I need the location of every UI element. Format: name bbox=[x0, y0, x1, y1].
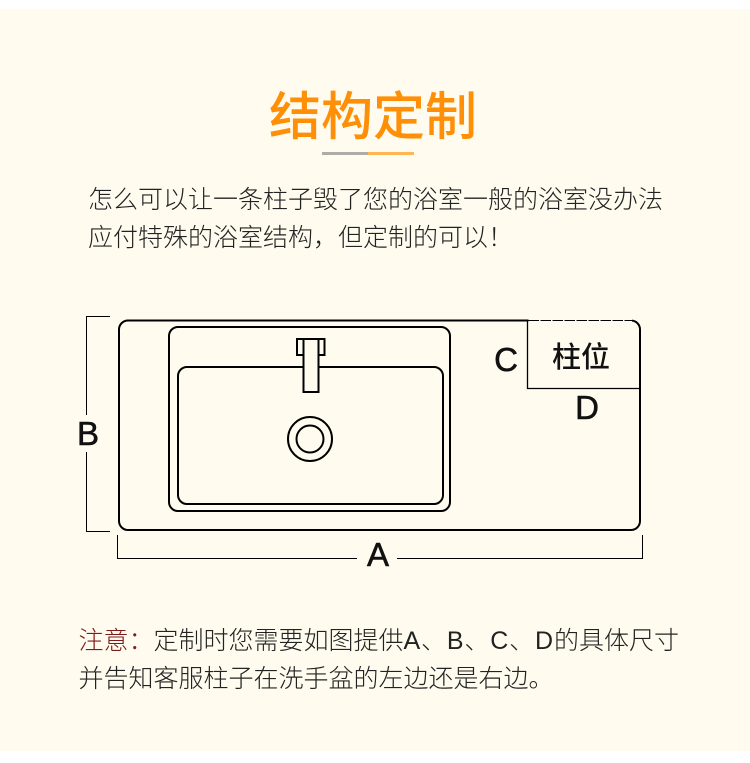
title: 结构定制 bbox=[269, 89, 477, 147]
intro text: 应付特殊的浴室结构，但定制的可以！ bbox=[88, 224, 513, 252]
dimension bracket B bbox=[86, 316, 110, 532]
dimension bracket A bbox=[118, 535, 642, 558]
intro text: 怎么可以让一条柱子毁了您的浴室一般的浴室没办法 bbox=[88, 186, 663, 214]
intro text bbox=[88, 186, 663, 252]
icon: faucet bbox=[297, 339, 324, 392]
dimension label A: A bbox=[367, 536, 389, 573]
pillar label: 柱位 bbox=[552, 341, 610, 374]
countertop outline bbox=[119, 320, 640, 530]
dimension label C: C bbox=[494, 341, 518, 378]
note text: 并告知客服柱子在洗手盆的左边还是右边。 bbox=[78, 665, 554, 693]
note text: 注意：定制时您需要如图提供A、B、C、D的具体尺寸 bbox=[78, 627, 679, 655]
pillar cut-out bbox=[528, 320, 640, 388]
dimension label D: D bbox=[575, 389, 599, 426]
dimension label B: B bbox=[77, 415, 99, 452]
title underline bbox=[322, 152, 414, 155]
basin outer rim bbox=[169, 327, 450, 511]
note text bbox=[78, 627, 679, 693]
icon: drain bbox=[288, 417, 332, 461]
basin inner bowl bbox=[178, 367, 443, 504]
